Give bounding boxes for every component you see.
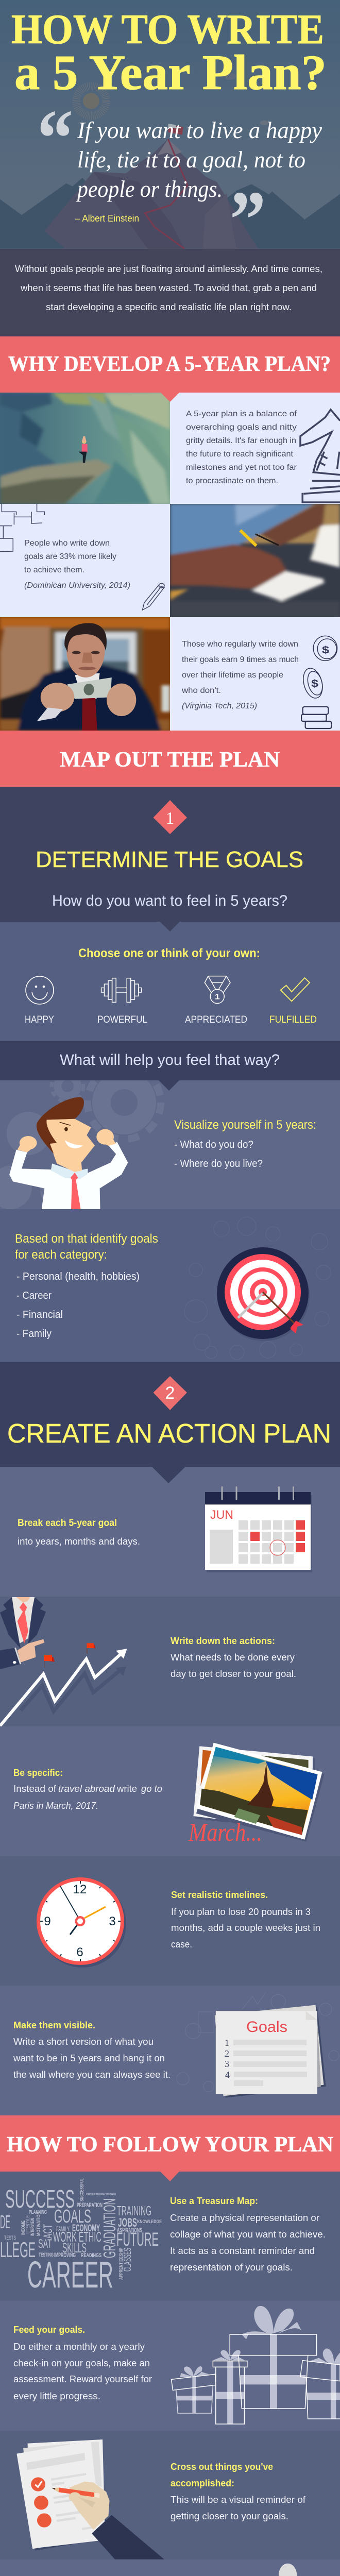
illustration: word cloud: FAMILY [56, 2225, 70, 2233]
dark bar with question [0, 1041, 340, 1091]
panel: realistic timelines: If you plan to lose 20 pounds in 3 [171, 1907, 311, 1917]
icon: diamond 1 [154, 800, 187, 834]
icon: diamond 1: 1 [166, 809, 174, 828]
panel: feed your goals: Feed your goals. [13, 2325, 85, 2335]
panel: categories: - Financial [16, 1309, 63, 1320]
illustration: gift boxes [172, 2306, 340, 2424]
illustration: word cloud: INTERVIEW [30, 2218, 35, 2236]
illustration: word cloud: DE [0, 2211, 10, 2232]
panel: cross out things: getting closer to your goals. [171, 2511, 288, 2521]
panel: break each goal: into years, months and days. [18, 1536, 140, 1547]
figure: woman in tree pose [78, 436, 88, 463]
panel: photo of hand writing [170, 504, 340, 617]
panel: break each goal: Break each 5-year goal [18, 1518, 117, 1529]
panel: photo of woman on cliff [0, 393, 170, 504]
panel: categories: for each category: [15, 1248, 107, 1262]
illustration: clock [37, 1877, 126, 1968]
icon: check [281, 978, 310, 1001]
illustration: word cloud: APPRENTICESHIP [118, 2248, 124, 2280]
panel: treasure map: collage of what you want to achieve. [170, 2229, 326, 2240]
icon: coins: $ [322, 644, 329, 656]
panel: writing earnings stat: who don't. [181, 686, 221, 695]
illustration: word cloud: FUTURE [116, 2229, 159, 2250]
list numbers: 2 [225, 2048, 229, 2059]
panel: 33 percent stat: (Dominican University, 2014) [24, 581, 130, 590]
panel: writing earnings stat: Those who regularly write down [182, 640, 298, 649]
illustration: word cloud: TRAINING [117, 2203, 151, 2218]
heading: map out the plan: MAP OUT THE PLAN [60, 748, 280, 772]
panel: feed your goals: Do either a monthly or a yearly [13, 2342, 145, 2352]
panel: be specific: Be specific: [13, 1768, 63, 1778]
icon: pencil [143, 583, 164, 610]
list numbers: 1 [225, 2038, 229, 2048]
illustration: word cloud: TESTS [4, 2235, 16, 2241]
panel: feelings: APPRECIATED [185, 1014, 247, 1025]
figure: man holding banknote [37, 623, 136, 731]
quote: ” [230, 175, 266, 265]
panel: feelings: FULFILLED [269, 1014, 317, 1025]
panel: categories: - Personal (health, hobbies) [16, 1271, 140, 1282]
list numbers: 3 [225, 2059, 229, 2069]
heading: why develop [0, 336, 340, 393]
panel: 33 percent stat [0, 504, 170, 617]
text: instead of [13, 1784, 162, 1811]
illustration: word cloud: LLEGE [0, 2238, 36, 2262]
illustration: clock: 6 [76, 1945, 83, 1959]
decoration doodles [177, 1993, 339, 2092]
panel: write down the actions: day to get closer to your goal. [171, 1669, 296, 1679]
panel: step 1 header [0, 787, 340, 922]
icon: coins [301, 636, 337, 728]
heading: why develop: WHY DEVELOP A 5-YEAR PLAN? [8, 352, 331, 376]
illustration: word cloud: JOBS [118, 2216, 137, 2230]
panel: step 1 header: DETERMINE THE GOALS [36, 847, 303, 872]
icon: medal: 1 [215, 992, 220, 1001]
heading: how to follow your plan: HOW TO FOLLOW YOUR PLAN [7, 2133, 333, 2157]
panel: feed your goals: check-in on your goals, make an [13, 2358, 150, 2368]
panel: realistic timelines: case. [171, 1939, 192, 1950]
title: HOW TO WRITE [11, 6, 324, 53]
decoration gears [0, 1066, 161, 1212]
illustration: word cloud: SAT [38, 2237, 52, 2251]
panel: add new objectives [0, 2560, 340, 2576]
illustration: man pointing at rising chart [0, 1597, 127, 1726]
panel: balance text: A 5-year plan is a balance of [186, 410, 297, 418]
heading: how to follow your plan [0, 2115, 340, 2172]
icon: coins: $ [311, 677, 318, 689]
title [11, 6, 327, 100]
icon: chess knight [300, 410, 340, 502]
panel: feelings: Choose one or think of your own: [78, 946, 260, 960]
step 2 header [0, 1362, 340, 1483]
illustration: clock: 3 [109, 1914, 116, 1928]
text: instead of: travel abroad [58, 1784, 115, 1794]
panel: feelings: POWERFUL [97, 1014, 147, 1025]
panel: hero [0, 0, 340, 265]
panel: balance text: the future to reach significant [186, 450, 294, 459]
icon: medal [205, 976, 230, 1004]
panel: writing earnings stat [170, 617, 340, 731]
illustration: word cloud: CAREER PATHWAY GROWTH [86, 2193, 116, 2196]
illustration: word cloud: INCOME [21, 2221, 26, 2235]
panel: visualize: Visualize yourself in 5 years: [174, 1118, 316, 1132]
panel: be specific [0, 1726, 340, 1856]
panel: realistic timelines: Set realistic timelines. [171, 1890, 268, 1900]
panel: photo of man with dollar bill [0, 617, 170, 731]
illustration: Paris photos [193, 1743, 325, 1842]
panel: intro: when it seems that life has been wasted. To avoid that, grab a pen and [20, 283, 317, 293]
icon: flowchart sketch [0, 504, 44, 552]
panel: categories: Based on that identify goals [15, 1232, 158, 1246]
illustration: word cloud: LIFESTYLE [25, 2215, 30, 2233]
panel: break each goal [0, 1362, 340, 1597]
illustration: word cloud: KNOWLEDGE [137, 2219, 162, 2224]
panel: write down the actions [0, 1597, 340, 1726]
panel: be specific: March... [188, 1818, 262, 1846]
panel: intro [0, 249, 340, 336]
illustration: calendar [205, 1486, 312, 1572]
illustration: word cloud: ASPIRATIONS [117, 2226, 142, 2234]
list numbers [225, 2038, 230, 2080]
quote [37, 93, 322, 265]
illustration: target [217, 1247, 310, 1341]
panel: treasure map: Create a physical representation or [170, 2213, 319, 2223]
figure: pen [240, 530, 279, 546]
panel: categories: - Family [16, 1328, 52, 1340]
panel: make them visible: the wall where you can always see it. [13, 2070, 171, 2080]
panel: feelings [0, 922, 340, 1041]
panel: cross out things: Cross out things you've [171, 2462, 273, 2472]
illustration: sun and mountains [0, 73, 340, 249]
illustration: word cloud: CLASSES [122, 2248, 133, 2272]
panel: 33 percent stat: People who write down [24, 539, 110, 548]
illustration: clock: 12 [73, 1883, 87, 1896]
panel: feed your goals: assessment. Reward yourself for [13, 2374, 152, 2384]
panel: realistic timelines [0, 1856, 340, 1986]
panel: feelings: HAPPY [25, 1014, 54, 1025]
text: instead of: go to [141, 1784, 162, 1794]
panel: intro: Without goals people are just floating around aimlessly. And time comes, [15, 264, 322, 274]
heading: map out the plan [0, 731, 340, 787]
panel: balance text: gritty details. It's far enough in [186, 436, 296, 445]
panel: treasure map [0, 2172, 340, 2301]
quote: If you want to live a happy [77, 117, 322, 143]
icon: dumbbell [101, 978, 142, 1002]
panel: treasure map: It acts as a constant reminder and [170, 2246, 315, 2256]
panel: make them visible [0, 1986, 340, 2115]
panel: balance text: to procrastinate on them. [186, 477, 278, 485]
panel: writing earnings stat: (Virginia Tech, 2015) [182, 702, 257, 710]
panel: make them visible: Make them visible. [13, 2020, 95, 2030]
panel: 33 percent stat: to achieve them. [24, 566, 84, 574]
panel: visualize [0, 1041, 340, 1212]
illustration: flexing man [9, 1097, 128, 1209]
quote: “ [37, 93, 73, 183]
title: a 5 Year Plan? [14, 45, 327, 100]
illustration: word cloud: ACT [41, 2224, 55, 2239]
illustration: goals list [215, 2005, 326, 2098]
illustration: word cloud: PREPARATION [77, 2201, 103, 2209]
illustration: word cloud: GOALS [54, 2206, 91, 2227]
illustration: word cloud: CAREER [27, 2255, 113, 2296]
illustration: word cloud [0, 2178, 162, 2296]
panel: 33 percent stat: goals are 33% more likely [24, 552, 116, 561]
illustration: word cloud: IMPROVING [54, 2251, 76, 2259]
panel: make them visible: Write a short version of what you [13, 2037, 154, 2047]
illustration: clock: 9 [44, 1914, 51, 1928]
illustration: word cloud: PLANNING [29, 2209, 47, 2215]
panel: treasure map: Use a Treasure Map: [170, 2196, 258, 2206]
panel: intro: start developing a specific and realistic life plan right now. [46, 302, 292, 312]
quote: – Albert Einstein [75, 213, 139, 224]
illustration: word cloud: SUCCESS [5, 2185, 75, 2213]
panel: make them visible: Goals [246, 2019, 287, 2036]
panel: write down the actions: What needs to be done every [171, 1652, 295, 1663]
decoration doodles [184, 1217, 331, 1360]
list numbers: 4 [225, 2070, 230, 2080]
illustration: word cloud: SUCCESSFUL [79, 2178, 85, 2201]
illustration: word cloud: GRADUATION [100, 2198, 119, 2258]
panel: cross out things [0, 2431, 340, 2560]
panel: cross out things: accomplished: [171, 2478, 234, 2488]
dark bar with question: What will help you feel that way? [60, 1052, 280, 1069]
panel: make them visible: want to be in 5 years and hang it on [13, 2053, 165, 2063]
panel: feed your goals [0, 2301, 340, 2431]
illustration: word cloud: WORK ETHIC [53, 2229, 101, 2245]
step 2 header: 2 [165, 1383, 175, 1403]
quote: people or things. [76, 176, 223, 202]
panel: treasure map: representation of your goals. [170, 2262, 293, 2273]
illustration: word cloud: ECONOMY [72, 2223, 100, 2234]
illustration: notebook, coffee and hands [218, 2564, 340, 2576]
panel: step 1 header: How do you want to feel in 5 years? [52, 892, 287, 909]
panel: balance text [161, 393, 340, 504]
illustration: word cloud: TESTING [39, 2252, 54, 2258]
panel: visualize: - Where do you live? [174, 1158, 263, 1170]
step 2 header: CREATE AN ACTION PLAN [7, 1419, 331, 1449]
panel: categories [0, 1209, 340, 1362]
panel: visualize: - What do you do? [174, 1139, 253, 1150]
text: instead of: Paris in March, 2017. [13, 1801, 98, 1811]
illustration: word cloud: MOTIVATION [36, 2212, 42, 2236]
text: instead of: Instead of [13, 1784, 57, 1794]
panel: writing earnings stat: their goals earn 9 times as much [182, 655, 299, 664]
quote: life, tie it to a goal, not to [77, 147, 305, 173]
illustration: word cloud: SKILLS [62, 2240, 87, 2256]
panel: feed your goals: every little progress. [13, 2391, 100, 2401]
illustration: calendar: JUN [210, 1508, 233, 1522]
panel: balance text: milestones and yet not too far [186, 463, 297, 472]
text: instead of: write [116, 1784, 137, 1794]
panel: cross out things: This will be a visual reminder of [171, 2495, 306, 2505]
illustration: checklist and hand [16, 2439, 164, 2560]
panel: categories: - Career [16, 1290, 52, 1301]
panel: write down the actions: Write down the actions: [171, 1636, 275, 1646]
panel: writing earnings stat: over their lifetime as people [182, 671, 283, 680]
panel: balance text: overarching goals and nitty [186, 423, 297, 432]
illustration: word cloud: READINGS [81, 2252, 101, 2259]
icon: smiley [26, 976, 54, 1004]
panel: realistic timelines: months, add a couple weeks just in [171, 1923, 320, 1933]
